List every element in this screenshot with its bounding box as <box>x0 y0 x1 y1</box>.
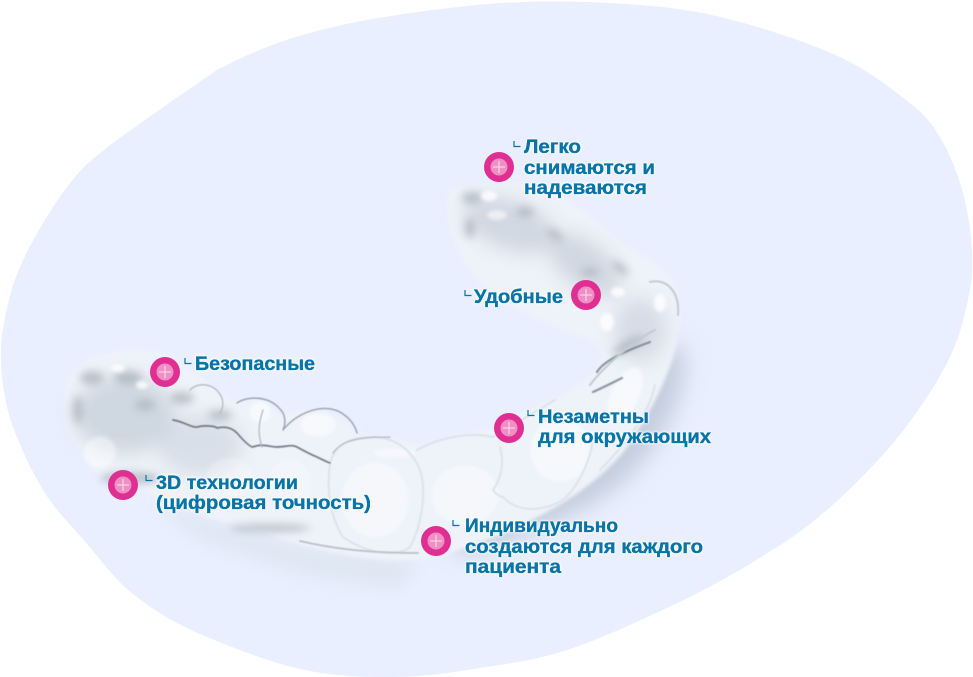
connector <box>185 358 192 364</box>
soft shadow <box>440 345 685 555</box>
callout: Безопасные <box>150 354 315 387</box>
marker <box>571 280 601 310</box>
marker <box>494 413 524 443</box>
connector <box>146 475 152 480</box>
label: Безопасные <box>195 354 315 375</box>
marker <box>421 526 451 556</box>
mottling <box>73 192 646 532</box>
label: (цифровая точность) <box>156 493 371 514</box>
label: Индивидуально <box>465 516 618 537</box>
label: создаются для каждого <box>465 537 703 558</box>
connector <box>453 520 460 526</box>
marker <box>108 470 138 500</box>
connector <box>528 410 534 416</box>
callout: Незаметны для окружающих <box>494 407 711 448</box>
callout: 3D технологии <box>108 470 371 514</box>
label: снимаются и <box>524 158 655 179</box>
faint floor reflection <box>150 500 420 590</box>
callout: Индивидуально создаются для каждого пациента <box>421 516 703 578</box>
label: Незаметны <box>538 407 649 428</box>
label: пациента <box>465 557 561 578</box>
highlights <box>84 191 666 538</box>
aligner body <box>64 182 681 560</box>
label: надеваются <box>524 178 647 199</box>
connector <box>514 141 520 146</box>
label: Удобные <box>474 287 563 308</box>
callout: Удобные <box>465 280 601 310</box>
connector <box>465 290 472 296</box>
tooth outlines <box>173 281 678 553</box>
label: Легко <box>524 137 581 158</box>
callout: Легко снимаются и надеваются <box>484 137 655 199</box>
label: для окружающих <box>538 427 711 448</box>
label: 3D технологии <box>156 473 298 494</box>
marker <box>484 152 514 182</box>
broad gray tone <box>75 186 666 475</box>
aligner photo illustration <box>64 182 685 590</box>
marker <box>150 357 180 387</box>
